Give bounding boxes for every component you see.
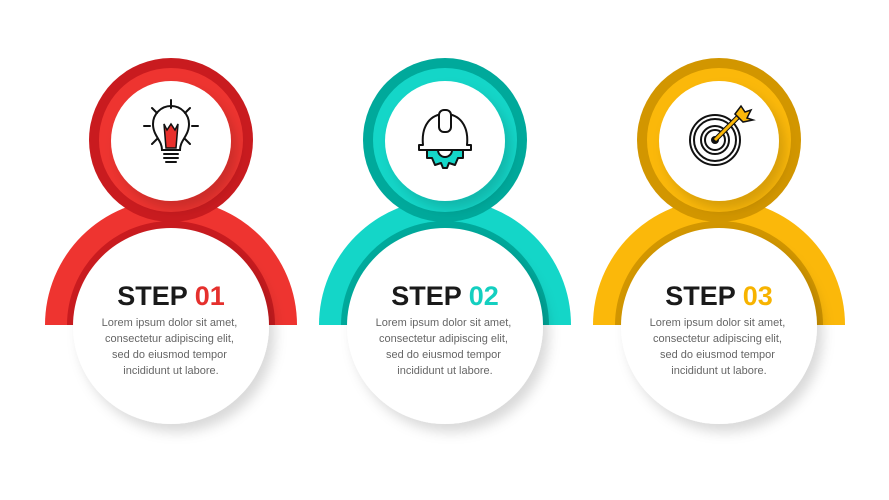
step 01 (45, 58, 297, 424)
heading: STEP 02 (391, 281, 499, 311)
top white circle (659, 81, 779, 201)
body text: consectetur adipiscing elit, (653, 333, 782, 345)
body text: Lorem ipsum dolor sit amet, (102, 317, 237, 329)
body text: Lorem ipsum dolor sit amet, (376, 317, 511, 329)
heading: STEP 03 (665, 281, 773, 311)
bottom white circle (621, 228, 817, 424)
body text: sed do eiusmod tempor (386, 349, 501, 361)
body text: sed do eiusmod tempor (112, 349, 227, 361)
body text: incididunt ut labore. (397, 365, 493, 377)
body text: consectetur adipiscing elit, (105, 333, 234, 345)
top ring (363, 58, 527, 222)
bottom white circle (73, 228, 269, 424)
heading: STEP 01 (117, 281, 225, 311)
body text: sed do eiusmod tempor (660, 349, 775, 361)
body text: incididunt ut labore. (671, 365, 767, 377)
icon: light bulb (144, 100, 198, 162)
top ring (637, 58, 801, 222)
top ring (89, 58, 253, 222)
body text: Lorem ipsum dolor sit amet, (650, 317, 785, 329)
body text: consectetur adipiscing elit, (379, 333, 508, 345)
bottom arc (319, 199, 571, 325)
bottom white circle (347, 228, 543, 424)
top white circle (111, 81, 231, 201)
bottom arc (45, 199, 297, 325)
step 03 (593, 58, 845, 424)
icon: helmet gear (419, 110, 471, 168)
step 02 (319, 58, 571, 424)
top white circle (385, 81, 505, 201)
icon: target (690, 106, 753, 165)
body text: incididunt ut labore. (123, 365, 219, 377)
bottom arc (593, 199, 845, 325)
